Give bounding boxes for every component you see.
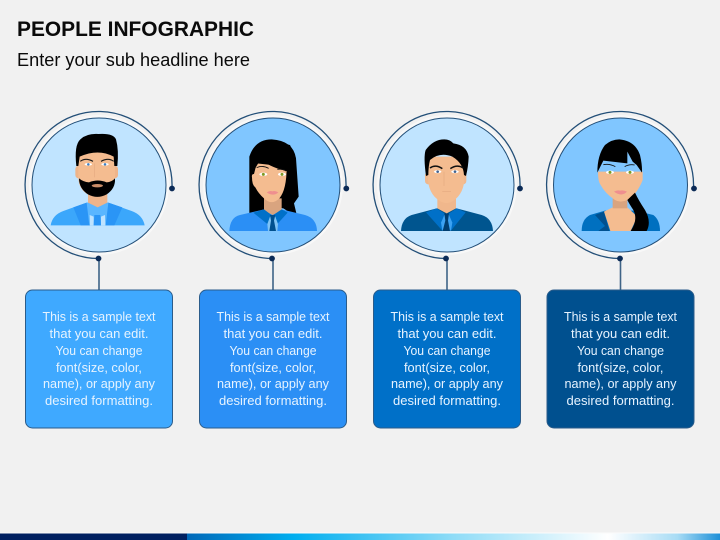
avatar circle 2 xyxy=(206,118,340,252)
text box 4: This is a sample text xyxy=(564,310,678,324)
ring and connector 2 xyxy=(199,112,349,290)
text box 1: that you can edit. xyxy=(50,327,148,341)
text box 4: desired formatting. xyxy=(566,394,674,408)
person panel 2: woman with long hair xyxy=(199,112,349,428)
icon: woman with long hair xyxy=(229,139,317,231)
sub headline: Enter your sub headline here xyxy=(17,50,250,70)
text box 2: You can change xyxy=(230,344,317,358)
person panel 3: man with tie xyxy=(373,112,523,428)
footer bar xyxy=(0,532,720,540)
ring and connector 4 xyxy=(547,112,697,290)
text box 2: name), or apply any xyxy=(217,377,330,391)
text box 3: desired formatting. xyxy=(393,394,501,408)
icon: bearded man xyxy=(51,134,145,225)
text box 1: font(size, color, xyxy=(56,361,142,375)
text box 4: font(size, color, xyxy=(578,361,664,375)
text box 1: This is a sample text xyxy=(42,310,156,324)
text box 2: that you can edit. xyxy=(224,327,322,341)
text box 3: font(size, color, xyxy=(404,361,490,375)
text box 1: You can change xyxy=(56,344,143,358)
text box 2 xyxy=(200,290,346,428)
text box 4: You can change xyxy=(577,344,664,358)
text box 1 xyxy=(26,290,172,428)
person panel 4: woman with ponytail xyxy=(547,112,697,428)
person panel 1: bearded man xyxy=(25,112,175,428)
text box 4: name), or apply any xyxy=(564,377,677,391)
text box 1: name), or apply any xyxy=(43,377,156,391)
text box 2: desired formatting. xyxy=(219,394,327,408)
avatar circle 4 xyxy=(554,118,688,252)
icon: woman with ponytail xyxy=(582,139,660,231)
text box 2: This is a sample text xyxy=(216,310,330,324)
text box 3: that you can edit. xyxy=(398,327,496,341)
title: PEOPLE INFOGRAPHIC xyxy=(17,18,254,41)
text box 3: name), or apply any xyxy=(391,377,504,391)
icon: man with tie xyxy=(401,139,493,231)
text box 3: This is a sample text xyxy=(390,310,504,324)
ring and connector 1 xyxy=(25,112,175,290)
avatar circle 1 xyxy=(32,118,166,252)
text box 4 xyxy=(547,290,694,428)
text box 3 xyxy=(374,290,520,428)
avatar circle 3 xyxy=(380,118,514,252)
text box 4: that you can edit. xyxy=(571,327,670,341)
text box 2: font(size, color, xyxy=(230,361,316,375)
text box 1: desired formatting. xyxy=(45,394,153,408)
ring and connector 3 xyxy=(373,112,523,290)
text box 3: You can change xyxy=(404,344,491,358)
